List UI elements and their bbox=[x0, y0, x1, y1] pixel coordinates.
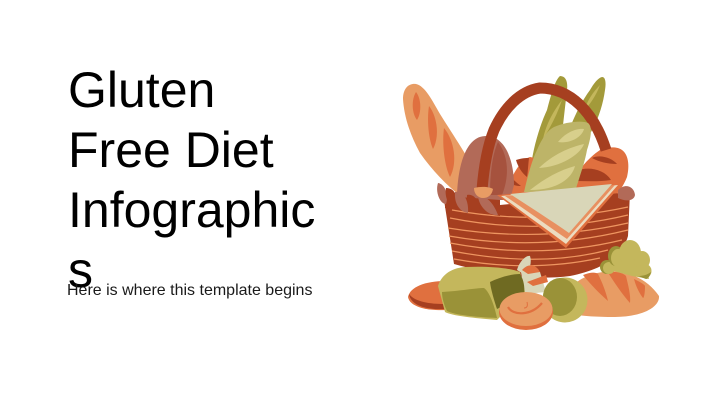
icon: green leafy vegetable bbox=[600, 240, 652, 279]
icon: green loaf bbox=[438, 267, 525, 320]
title: Free Diet bbox=[68, 122, 274, 178]
title: s bbox=[68, 242, 93, 298]
title: Infographic bbox=[68, 182, 315, 238]
icon: basket handle bbox=[482, 88, 606, 190]
icon: basket rim bbox=[437, 183, 635, 216]
icon: left baguette bbox=[403, 84, 467, 197]
subtitle: Here is where this template begins bbox=[67, 282, 312, 299]
icon: olive ball bbox=[542, 278, 588, 322]
title bbox=[68, 62, 315, 298]
icon: left bun bbox=[408, 281, 448, 310]
icon: right bread bbox=[570, 271, 659, 317]
icon: napkin bbox=[497, 184, 622, 248]
title: Gluten bbox=[68, 62, 215, 118]
icon: orange bread behind basket bbox=[507, 147, 628, 200]
icon: basket body bbox=[444, 192, 630, 278]
icon: cupcake bbox=[517, 256, 548, 294]
icon: light olive bread bbox=[524, 122, 591, 192]
icon: round brown bread bbox=[457, 136, 514, 200]
icon: swirl roll bbox=[499, 292, 553, 330]
icon: olive baguettes bbox=[530, 76, 606, 175]
